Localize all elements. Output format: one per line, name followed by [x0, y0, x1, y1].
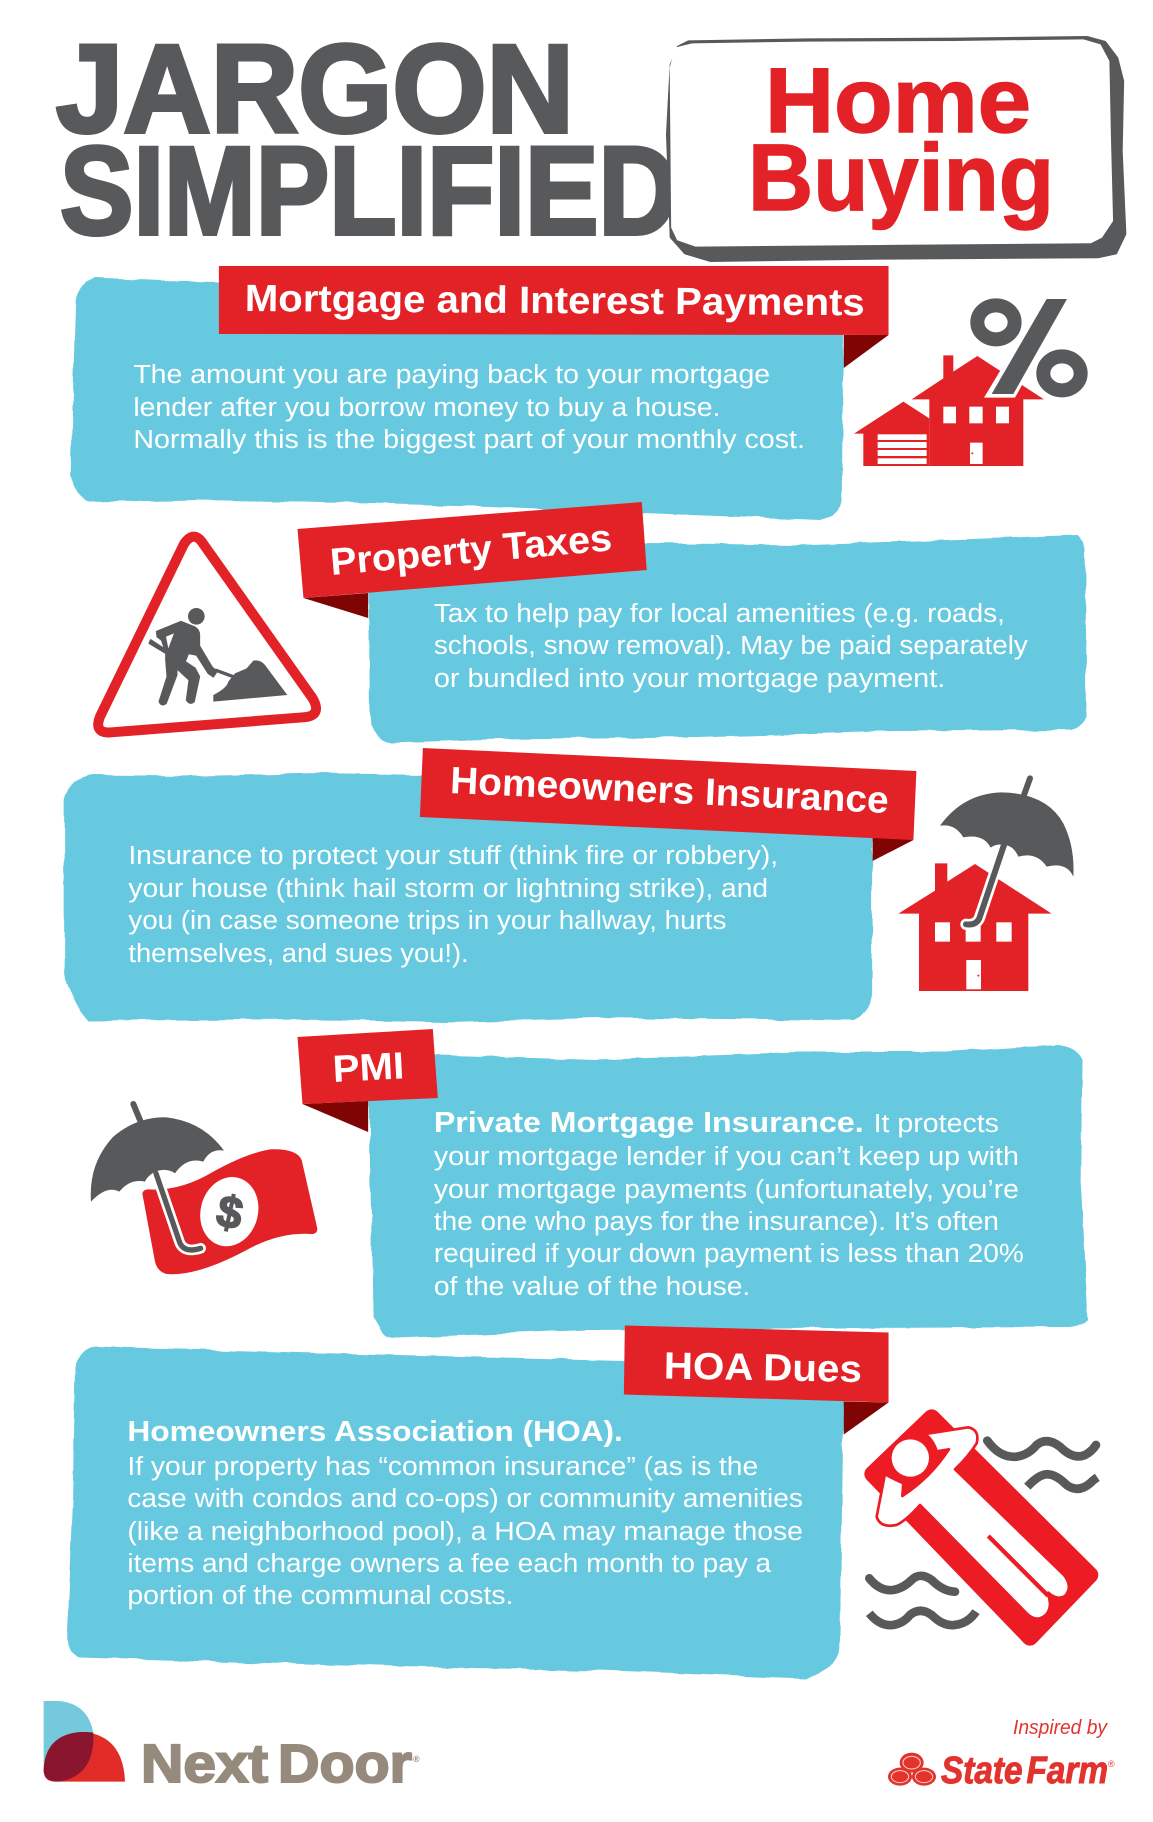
panel: homeowners insurance [64, 748, 1074, 1022]
body text: HOA dues: (like a neighborhood pool), a HOA may manage those [127, 1518, 803, 1546]
icon: road work sign [98, 537, 316, 732]
banner fold [844, 335, 889, 368]
banner fold [844, 1402, 889, 1434]
title: Jargon Simplified: JARGON [56, 20, 574, 159]
credit: inspired by State Farm: Inspired by [1013, 1717, 1108, 1739]
body text: mortgage: Normally this is the biggest part of your monthly cost. [133, 426, 805, 454]
body text: mortgage [133, 361, 805, 454]
credit: inspired by State Farm [888, 1717, 1115, 1792]
banner fold [873, 834, 913, 861]
body text: mortgage: The amount you are paying back to your mortgage [133, 361, 770, 389]
banner: homeowners insurance heading [420, 748, 916, 840]
body text: property taxes: Tax to help pay for local amenities (e.g. roads, [434, 600, 1005, 628]
panel: PMI [91, 1029, 1089, 1338]
body text: PMI: your mortgage lender if you can’t keep up with [434, 1143, 1019, 1171]
body text: property taxes [434, 600, 1028, 693]
body text: PMI: the one who pays for the insurance). It’s often [434, 1208, 999, 1236]
logo mark [44, 1701, 125, 1782]
body text: mortgage: lender after you borrow money to buy a house. [133, 394, 720, 422]
body text: HOA dues: items and charge owners a fee each month to pay a [127, 1550, 772, 1578]
icon: person on pool float with waves [869, 1418, 1097, 1637]
body text: HOA dues [127, 1416, 803, 1610]
body text: PMI: Private Mortgage Insurance. [434, 1107, 864, 1139]
logo: State Farm wordmark: State Farm [941, 1750, 1108, 1792]
logo: State Farm ovals [888, 1753, 936, 1786]
panel: mortgage and interest payments [71, 266, 1081, 520]
logo wordmark [141, 1734, 420, 1794]
banner: property taxes heading: Property Taxes [328, 517, 614, 584]
body text: PMI: your mortgage payments (unfortunately, you’re [434, 1176, 1019, 1204]
banner: HOA dues heading [624, 1326, 889, 1402]
icon: house with umbrella [898, 778, 1074, 991]
heading box: Home Buying: Buying [748, 125, 1054, 231]
body text: homeowners insurance: Insurance to protect your stuff (think fire or robbery), [128, 842, 778, 870]
banner fold [302, 1101, 368, 1132]
body text: PMI: required if your down payment is less than 20% [434, 1240, 1024, 1268]
body text: PMI: It protects [874, 1110, 999, 1138]
banner: property taxes heading [298, 502, 647, 598]
body text: HOA dues: portion of the communal costs. [127, 1582, 513, 1610]
banner: homeowners insurance heading: Homeowners Insurance [449, 760, 890, 822]
banner: HOA dues heading: HOA Dues [664, 1345, 862, 1391]
heading box: Home Buying [666, 36, 1126, 262]
body text: HOA dues: case with condos and co-ops) or community amenities [127, 1485, 803, 1513]
body text: homeowners insurance: themselves, and sues you!). [128, 940, 469, 968]
panel: property taxes [98, 502, 1087, 743]
body text: property taxes: schools, snow removal). May be paid separately [434, 632, 1028, 660]
banner: mortgage heading [219, 266, 889, 335]
title: Jargon Simplified [56, 20, 678, 261]
icon: houses with percent sign [854, 299, 1081, 466]
title: Jargon Simplified: SIMPLIFIED [60, 122, 678, 261]
banner: mortgage heading: Mortgage and Interest Payments [245, 278, 865, 324]
body text: homeowners insurance: your house (think hail storm or lightning strike), and [128, 875, 768, 903]
banner: PMI heading [298, 1029, 438, 1104]
body text: HOA dues: Homeowners Association (HOA). [127, 1416, 623, 1448]
logo wordmark: Next [141, 1734, 268, 1794]
icon: umbrella over dollar bill [91, 1104, 317, 1274]
body text: PMI [434, 1107, 1024, 1301]
heading box: Home Buying: Home [765, 50, 1031, 152]
body text: HOA dues: If your property has “common insurance” (as is the [127, 1453, 758, 1481]
logo wordmark: Door [278, 1734, 412, 1794]
banner: PMI heading: PMI [332, 1045, 405, 1091]
body text: homeowners insurance [128, 842, 778, 968]
logo wordmark: ® [413, 1754, 420, 1764]
panel: HOA dues [67, 1326, 1097, 1678]
icon: umbrella over dollar bill: $ [212, 1185, 247, 1240]
credit: inspired by State Farm: ® [1108, 1759, 1115, 1769]
body text: homeowners insurance: you (in case someone trips in your hallway, hurts [128, 907, 726, 935]
banner fold [303, 593, 368, 618]
body text: PMI: of the value of the house. [434, 1273, 750, 1301]
body text: property taxes: or bundled into your mortgage payment. [434, 665, 945, 693]
logo: Next Door [44, 1701, 420, 1794]
